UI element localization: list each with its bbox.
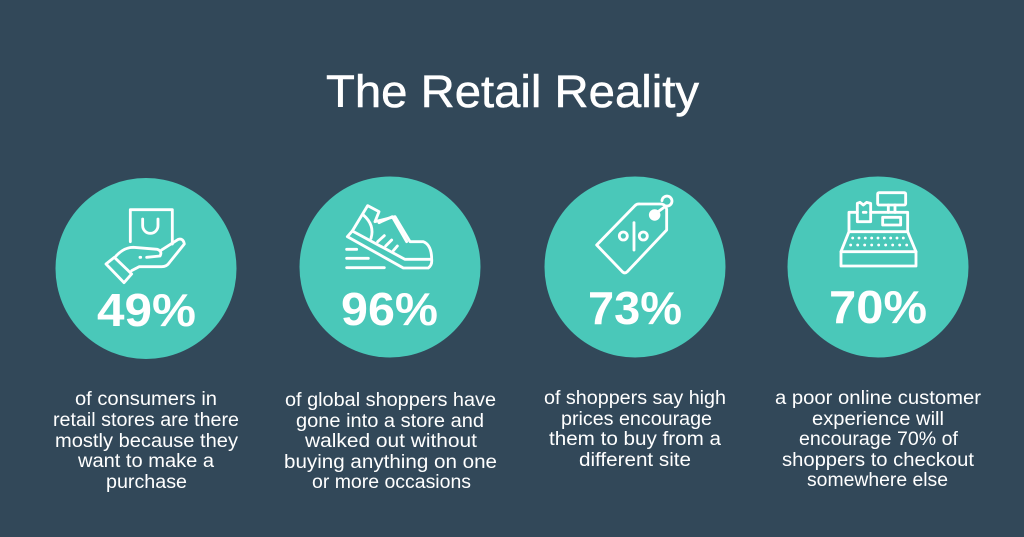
text: 96% description: walked out without [304, 431, 478, 452]
circle: 96% [300, 176, 480, 358]
text: 70% description: shoppers to checkout [782, 450, 975, 471]
icon: discount price tag [597, 196, 672, 273]
title: The Retail Reality [326, 66, 700, 117]
text: 70% description: encourage 70% of [799, 429, 959, 450]
icon: hand holding shopping bag [106, 210, 184, 283]
text: 73% description: of shoppers say high [544, 388, 726, 409]
text: 49% description: purchase [106, 472, 187, 493]
panel: 49% consumers [53, 178, 239, 493]
icon: cash register [841, 193, 916, 266]
text: 96% description [284, 390, 497, 493]
panel: 70% shoppers [775, 176, 982, 491]
panel: 96% shoppers [284, 176, 497, 493]
circle: 49% [56, 178, 236, 359]
text: 70% description: experience will [812, 409, 944, 430]
text: 70% description [775, 388, 982, 491]
text: 96% description: gone into a store and [296, 411, 484, 432]
text: 49% description: mostly because they [55, 431, 239, 452]
text: 73% description: them to buy from a [549, 429, 721, 450]
text: 49% description: retail stores are there [53, 410, 239, 431]
stat: 96%: 96% [341, 283, 438, 335]
text: 96% description: of global shoppers have [285, 390, 496, 411]
circle: 73% [544, 176, 726, 358]
stat: 70%: 70% [829, 281, 927, 333]
text: 70% description: a poor online customer [775, 388, 982, 409]
stat: 49%: 49% [97, 284, 196, 336]
icon: running shoe [347, 206, 432, 268]
text: 96% description: or more occasions [312, 472, 471, 493]
text: 49% description [53, 389, 239, 493]
text: 73% description: prices encourage [561, 409, 712, 430]
text: 96% description: buying anything on one [284, 452, 497, 473]
circle: 70% [788, 176, 968, 358]
text: 70% description: somewhere else [807, 470, 948, 491]
panel: 73% shoppers [544, 176, 726, 471]
text: 73% description [544, 388, 726, 471]
text: 49% description: of consumers in [75, 389, 217, 410]
stat: 73%: 73% [588, 282, 682, 334]
text: 49% description: want to make a [77, 451, 214, 472]
text: 73% description: different site [579, 450, 691, 471]
